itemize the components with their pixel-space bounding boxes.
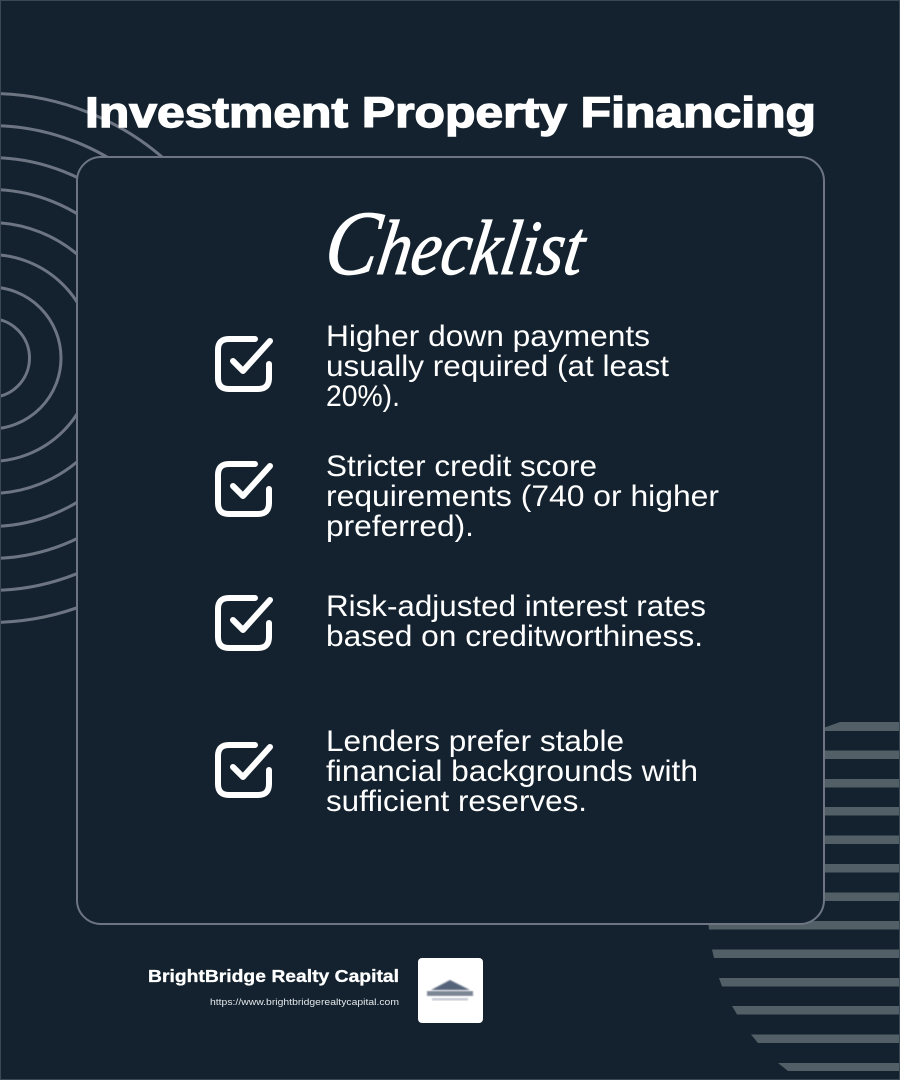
text: financial backgrounds: financial backgrounds with bbox=[326, 755, 698, 788]
footer url: https://www.brightbridgerealtycapital.com bbox=[210, 997, 399, 1008]
logo bar bbox=[427, 991, 473, 996]
icon: checkbox 1 bbox=[218, 339, 270, 389]
logo bbox=[418, 958, 483, 1023]
heading: Checklist: Checklist bbox=[319, 194, 595, 295]
icon: checkbox 3 bbox=[218, 598, 270, 648]
text: credit score: Stricter credit score bbox=[326, 450, 597, 483]
checklist item 4 bbox=[218, 725, 706, 818]
text: down payments: usually required (at least bbox=[326, 350, 669, 383]
text: interest rates: based on creditworthiness. bbox=[326, 620, 703, 653]
text: financial backgrounds: sufficient reserves. bbox=[326, 785, 587, 818]
text: credit score: requirements (740 or higher bbox=[326, 480, 719, 513]
text: credit score: preferred). bbox=[326, 510, 474, 543]
footer company name: BrightBridge Realty Capital bbox=[148, 966, 399, 986]
icon: checkbox 4 bbox=[218, 745, 270, 795]
checklist item 3 bbox=[218, 590, 714, 653]
panel: checklist card bbox=[77, 157, 824, 924]
icon: logo roof bbox=[431, 980, 470, 990]
title: Investment Property Financing bbox=[85, 89, 816, 137]
checklist item 2 bbox=[218, 450, 727, 543]
decorative stripes bbox=[708, 722, 900, 1071]
icon: checkbox 2 bbox=[218, 464, 270, 514]
text: financial backgrounds: Lenders prefer stable bbox=[326, 725, 624, 758]
text: interest rates: Risk-adjusted interest rates bbox=[326, 590, 706, 623]
text: down payments: 20%). bbox=[326, 380, 400, 413]
logo tile bbox=[418, 958, 483, 1023]
decorative concentric arcs bbox=[0, 94, 254, 622]
checklist item 1 bbox=[218, 320, 677, 413]
text: down payments: Higher down payments bbox=[326, 320, 650, 353]
logo tagline bbox=[432, 998, 468, 1000]
